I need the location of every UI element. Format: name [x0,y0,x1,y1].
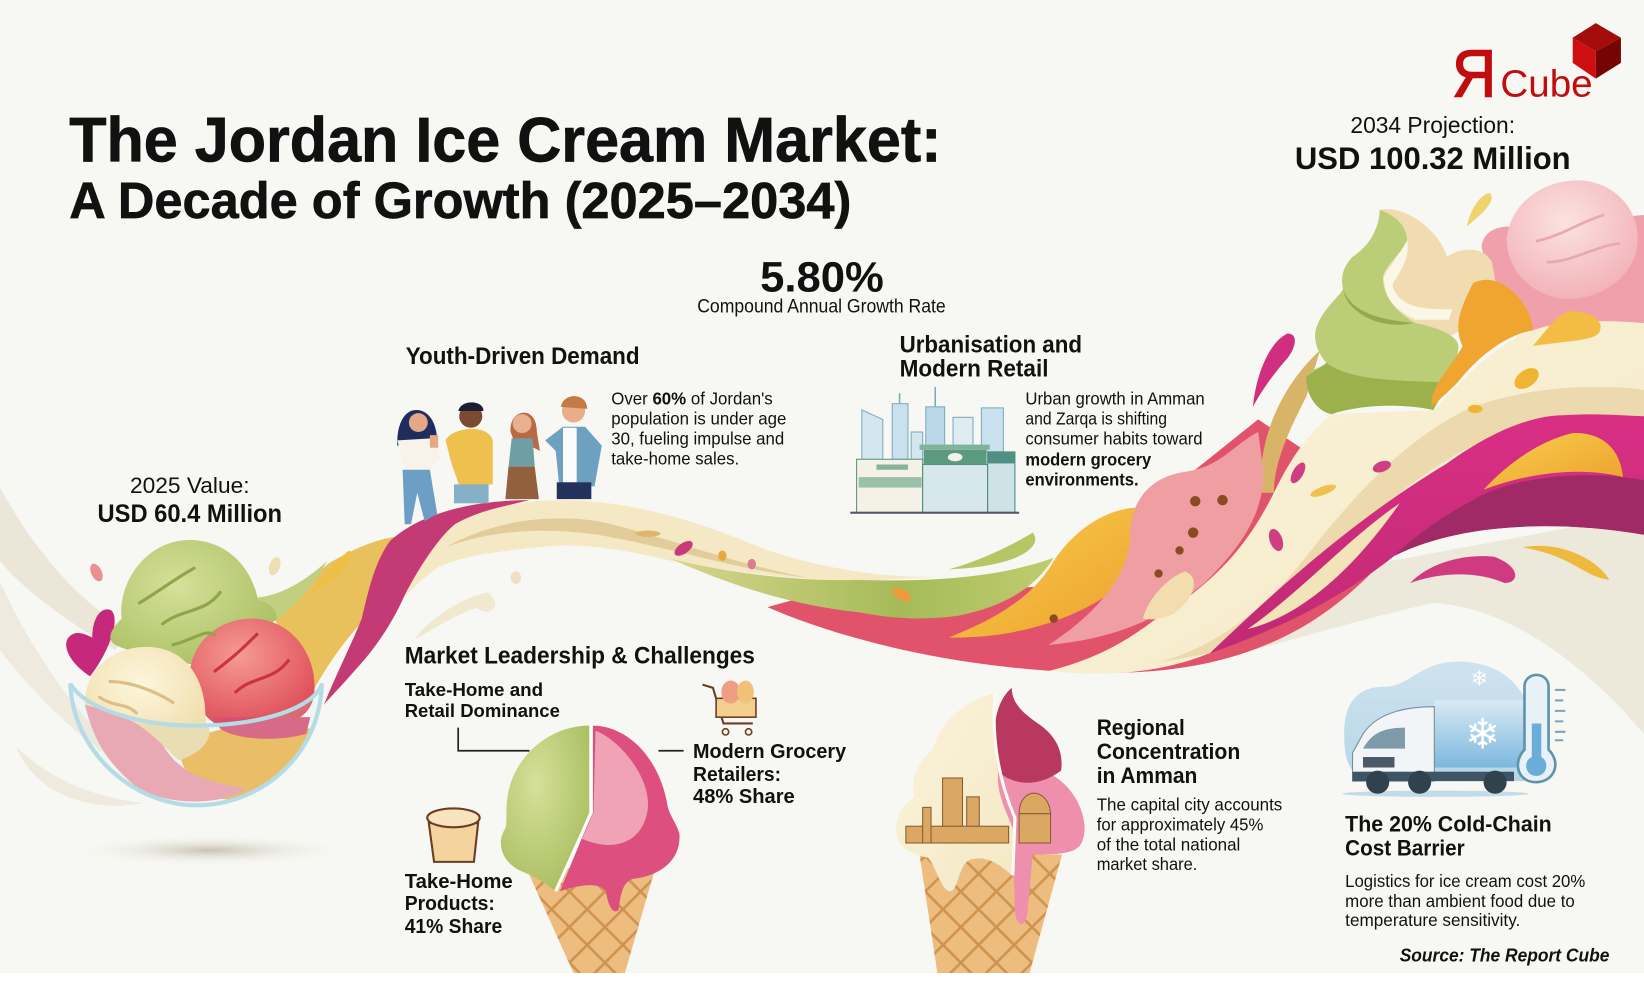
section: market leadership: Retailers: [693,763,781,786]
person 3 [505,413,540,499]
ice cream ribbon [252,321,1644,705]
truck icon [1342,662,1565,797]
section: youth-driven demand: 30, fueling impulse and [611,429,784,449]
logo word: Cube [1500,62,1593,104]
ribbon: magenta strand [324,500,529,705]
logo [1452,23,1621,111]
yellow peak [1533,311,1601,346]
orange drip [1431,280,1533,407]
section: market leadership: 41% Share [405,915,502,938]
stat: CAGR: Compound Annual Growth Rate [697,295,946,317]
section: regional concentration: Concentration [1097,739,1240,764]
ribbon: cream mass [1048,321,1644,674]
cold cloud [1344,662,1524,781]
white strand [1384,225,1452,320]
truck box [1434,700,1524,768]
logo cube [1573,23,1621,79]
section: cold-chain: more than ambient food due to [1345,891,1575,911]
red scoop [190,619,315,723]
pink scoop skirt [1481,215,1644,330]
logo letter: Я [1452,36,1496,111]
ribbon: pink flow [1048,432,1263,645]
ribbon: magenta band [1210,414,1644,653]
truck cab [1353,707,1434,781]
top right ice cream [1306,180,1644,414]
section: cold-chain: temperature sensitivity. [1345,910,1520,930]
bowl glass [70,684,322,805]
thermometer fluid [1526,723,1546,776]
ribbon: almond shape [1143,571,1194,619]
ribbon: green band [671,558,1054,618]
pink scoop ridges [1536,215,1620,262]
cream swirl [1380,209,1499,336]
wheels [1366,771,1389,794]
section: regional concentration: of the total national [1097,834,1240,854]
section: regional concentration [1097,715,1282,874]
section: youth-driven demand: population is under age [611,409,786,429]
person 4 [545,396,602,499]
section: cold-chain [1345,811,1585,930]
dark pink swirl [994,688,1062,783]
ribbon: yellow strand [268,537,395,692]
bowl shadow [68,835,351,866]
splashes [88,193,1609,640]
ribbon: cream sliver [1248,503,1400,629]
section: market leadership: Market Leadership & Challenges [405,643,755,669]
thermometer [1518,675,1555,782]
skyline [906,778,1051,843]
ribbon: sprinkles [635,364,1543,623]
section: market leadership: Products: [405,892,495,915]
section: urbanisation: modern grocery [1025,450,1151,470]
bowl lower cream [136,723,209,760]
icon: heart [66,609,115,676]
snowflake: ❄ [1465,711,1500,758]
section: urbanisation: and Zarqa is shifting [1025,409,1167,429]
section: market leadership: 48% Share [693,785,795,808]
green swirl shading [1306,363,1444,414]
section: regional concentration: market share. [1097,854,1197,874]
person 1 [397,410,440,524]
cone [920,855,1062,973]
section: market leadership: Modern Grocery [693,740,847,763]
ribbon: coral lower band [767,419,1415,673]
callout line: take-home and retail [458,728,529,751]
section: cold-chain: The 20% Cold-Chain [1345,811,1552,836]
stat: 2034 projection: 2034 Projection: [1350,112,1515,138]
chassis [1353,772,1514,781]
section: market leadership: Take-Home and [405,679,543,700]
scoop divider [556,726,591,891]
icon: shopping cart [702,680,756,735]
section: cold-chain: Logistics for ice cream cost 20% [1345,871,1585,891]
section: regional concentration: The capital city accounts [1097,794,1282,814]
section: urbanisation [900,331,1205,489]
section: youth-driven demand: Over 60% of Jordan's [611,389,773,409]
bowl of ice cream [66,540,322,805]
section: market leadership [405,643,847,938]
ribbon: beige band [1159,387,1644,663]
section: market leadership: Take-Home [405,870,513,893]
stat: CAGR: 5.80% [760,254,884,302]
light pink face [582,731,648,845]
pink scoop [998,766,1085,924]
icon: city and store [850,387,1019,514]
stat: 2034 projection: USD 100.32 Million [1295,141,1571,176]
pink half [560,726,680,911]
cab window [1363,728,1405,749]
section: youth-driven demand [406,343,786,468]
section: urbanisation: environments. [1025,469,1139,489]
title: The Jordan Ice Cream Market: [69,105,942,175]
source: Source: The Report Cube [1400,944,1609,965]
ribbon: tan highlight [446,518,807,578]
divider [994,693,1015,875]
ribbon: cream strand [403,500,944,600]
cream scoop [85,647,208,752]
section: urbanisation: Urbanisation and [900,331,1082,357]
title [69,105,942,229]
section: regional concentration: for approximately 45% [1097,814,1264,834]
section: youth-driven demand: Youth-Driven Demand [406,343,640,369]
small snowflake: ❄ [1471,668,1488,691]
green half [501,726,589,891]
green swirl [1306,210,1458,414]
stat: 2025 value: 2025 Value: [130,473,250,498]
section: urbanisation: consumer habits toward [1025,429,1203,449]
ribbon: yellow teardrop [1484,433,1623,490]
grille [1363,757,1394,768]
stat: 2025 value [98,473,282,528]
bowl contents: orange [178,726,310,799]
cream swirl [896,693,1015,891]
green scoop [110,540,277,671]
callout line: modern grocery [658,750,684,752]
stat: 2025 value: USD 60.4 Million [98,501,282,528]
icon: take-home cup [427,808,480,862]
section: regional concentration: in Amman [1097,763,1197,788]
ground shadow [1342,791,1529,797]
section: urbanisation: Modern Retail [900,355,1048,381]
ribbon: olive strand [252,561,327,621]
cone [526,868,655,973]
stat: 2034 projection [1295,112,1571,176]
stat: CAGR [697,254,946,317]
people group [397,396,602,524]
split scoop cone [501,726,680,973]
section: urbanisation: Urban growth in Amman [1025,389,1205,409]
background swooshes [0,488,1644,806]
section: youth-driven demand: take-home sales. [611,448,739,468]
ribbon: orange flow [949,507,1154,638]
title: A Decade of Growth (2025–2034) [69,171,851,229]
section: cold-chain: Cost Barrier [1345,836,1465,861]
thermometer ticks [1555,690,1565,740]
section: market leadership: Retail Dominance [405,700,560,721]
ribbon: dark magenta [1394,475,1644,556]
section: regional concentration: Regional [1097,715,1185,740]
scoop ridges [100,568,288,713]
pink scoop dome [1507,180,1638,299]
person 2 [446,402,493,503]
Amman cone [896,688,1085,973]
bowl contents: rose [213,717,310,739]
green swirl mid band [1343,289,1413,325]
ribbon: tan column [1260,350,1320,493]
bowl pink swirl [85,705,246,801]
